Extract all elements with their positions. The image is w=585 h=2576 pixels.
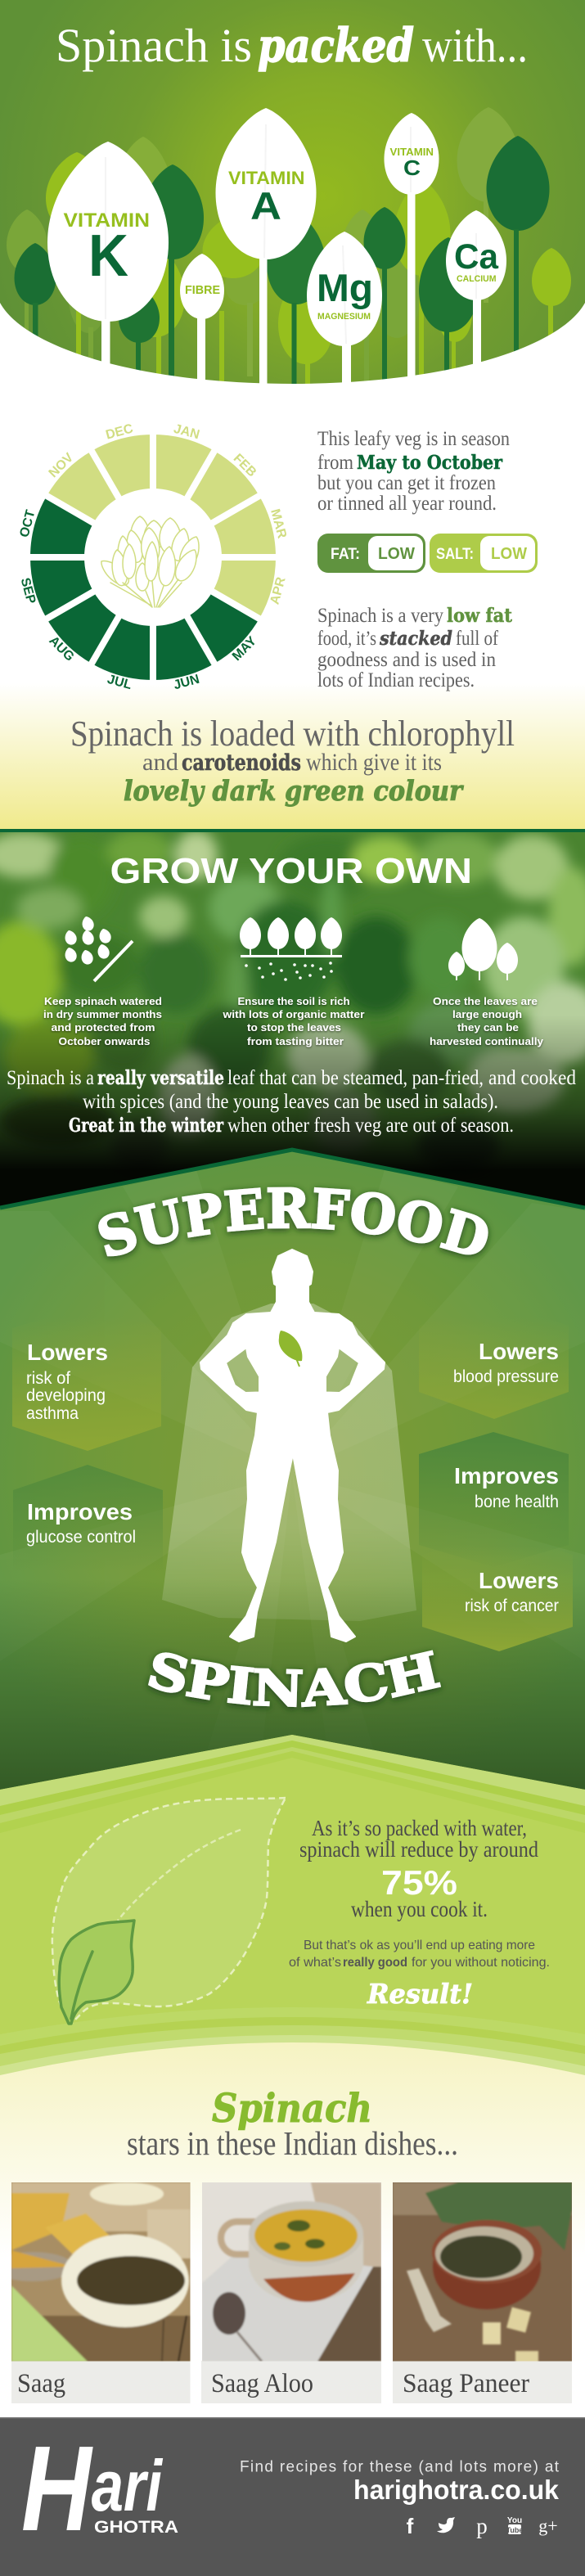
title: Spinach is [56,19,252,72]
caption: soil: from tasting bitter [247,1036,344,1047]
illustration: shrinking leaf [52,1798,286,2024]
label: saag aloo: Saag Aloo [211,2369,313,2398]
caption: watering: Keep spinach watered [44,996,162,1007]
label: saag: Saag [17,2369,65,2398]
text block: reduce by 75 percent: for you without noticing. [412,1956,550,1970]
month labels: AUG [46,633,77,664]
text block: chlorophyll: Spinach is loaded with chlorophyll [70,714,515,754]
leaf: vitamin A: A [250,184,281,227]
silhouette: superhero [200,1250,385,1642]
badge: fat low: FAT: [331,546,360,563]
icons: social media: Tube [506,2526,523,2534]
panel: indian dishes [0,2042,585,2403]
caption: soil: Ensure the soil is rich [237,996,350,1007]
leaf: magnesium: Mg [317,266,373,309]
badge: salt low: SALT: [436,546,474,563]
text block: season [317,428,510,515]
text block: low fat: full of [456,628,499,650]
benefit: improves glucose [26,1499,136,1547]
caption: watering: October onwards [59,1036,151,1047]
icon: rich soil [240,917,342,981]
benefit: improves bone health: bone health [475,1493,559,1511]
text block: versatile leaf: really versatile [97,1067,224,1089]
text block: versatile leaf: and cooked [488,1067,576,1089]
hexagon: blood pressure [419,1301,569,1419]
card: saag [0,2182,191,2403]
benefit: lowers cancer: risk of cancer [465,1596,559,1615]
hexagon: glucose [13,1465,163,1624]
caption: watering: and protected from [51,1022,155,1034]
benefit: lowers asthma: asthma [26,1404,79,1423]
text block: reduce by 75 percent: Result! [367,1978,473,2010]
benefit: lowers blood pressure: blood pressure [453,1367,559,1386]
heading: spinach: SPINACH [146,1649,443,1712]
caption: harvest: Once the leaves are [433,996,538,1007]
text block: chlorophyll: lovely dark green colour [124,775,464,808]
month labels: OCT [17,508,38,539]
caption: harvest [430,996,543,1047]
text block: reduce by 75 percent [289,1816,550,2010]
leaf: calcium: Ca [454,237,499,277]
text: find recipes: Find recipes for these (and lots more) at [240,2458,560,2476]
blurred spinach photo [0,831,585,1225]
text block: versatile leaf: Great in the winter [69,1115,224,1137]
benefit: lowers cancer [465,1568,559,1615]
text block: low fat: Spinach is a very [317,605,443,627]
title [56,19,528,73]
caption: watering: in dry summer months [43,1009,162,1020]
month labels [17,421,289,692]
curved base of header [0,303,585,397]
text block: season: This leafy veg is in season [317,428,510,450]
leaf: calcium: CALCIUM [457,274,496,284]
month labels: APR [268,575,289,606]
text block: season: or tinned all year round. [317,493,497,515]
benefit: lowers cancer: Lowers [479,1568,559,1593]
hexagon: cancer [422,1530,573,1651]
hexagon: bone health [419,1432,569,1567]
text block: reduce by 75 percent: As it’s so packed with water, [312,1816,527,1840]
month labels: MAY [230,634,259,664]
text block: reduce by 75 percent: really good [343,1956,407,1970]
card: saag paneer [393,2182,572,2403]
benefit: improves bone health: Improves [454,1463,559,1488]
month labels: JUN [172,673,201,692]
leaf: vitamin A: VITAMIN [228,168,304,188]
card: saag aloo [201,2182,381,2403]
leaf: vitamin K: K [88,223,128,289]
hexagon: asthma [12,1305,161,1451]
text block: reduce by 75 percent: spinach will reduce by around [299,1837,538,1862]
text block: chlorophyll [70,714,515,808]
month labels: MAR [268,507,289,540]
text block: low fat: stacked [379,628,452,650]
text block: versatile leaf [7,1067,576,1137]
title: packed [258,19,414,73]
text: website: harighotra.co.uk [353,2475,560,2505]
icon: chest leaf [279,1331,302,1367]
text block: low fat: goodness and is used in [317,649,496,671]
month labels: JAN [172,422,201,442]
caption: soil: to stop the leaves [247,1022,341,1034]
benefit: lowers asthma: risk of [26,1369,70,1388]
benefit: improves bone health [454,1463,559,1511]
heading: superfood: SUPERFOOD [95,1185,492,1262]
text block: reduce by 75 percent: when you cook it. [351,1897,488,1921]
icon: spinach bunch [97,516,204,607]
leaf: vitamin C: VITAMIN [389,146,434,158]
benefit: lowers asthma [26,1340,108,1423]
text block: versatile leaf: when other fresh veg are out of season. [227,1115,514,1137]
caption: harvest: they can be [457,1022,519,1034]
leaf: vitamin A [228,168,304,227]
panel: season and chlorophyll background [0,683,585,829]
leaf: vitamin K [64,209,150,289]
photo: saag [0,2182,191,2362]
benefit: lowers asthma: developing [26,1386,106,1405]
title: with... [422,19,528,72]
text block: low fat [317,605,512,691]
text block: versatile leaf: leaf that can be steamed, pan-fried, [227,1067,484,1089]
month labels: JUL [106,673,133,692]
logo: hari ghotra: GHOTRA [94,2518,178,2537]
month labels: FEB [231,452,259,480]
text block: season: from [317,452,353,474]
logo: hari ghotra [21,2421,178,2556]
text block: low fat: low fat [447,605,512,627]
text block: reduce by 75 percent: of what’s [289,1956,341,1970]
month labels: DEC [104,421,135,443]
caption: harvest: large enough [452,1009,522,1020]
label: saag paneer: Saag Paneer [403,2369,529,2398]
photo: saag paneer [393,2182,572,2364]
text block: reduce by 75 percent: But that’s ok as you’ll end up eating more [304,1939,535,1952]
text block: chlorophyll: carotenoids [182,750,301,776]
logo: hari ghotra: H [21,2421,109,2556]
icons: social media: f [407,2514,414,2538]
icon: water drops [63,915,133,981]
leaf: vitamin C [389,146,434,180]
icon: grown leaves [448,918,518,980]
leaf: vitamin K: VITAMIN [64,209,150,232]
badge: salt low: LOW [491,545,527,563]
panel: water content [0,1735,585,2095]
text block: season: but you can get it frozen [317,472,496,494]
badge: fat low: LOW [378,545,415,563]
cape [162,1304,416,1621]
leaf: vitamin C: C [403,155,421,180]
heading: spinach stars: stars in these Indian dishes... [127,2124,458,2162]
text block: versatile leaf: with spices (and the young leaves can be used in salads). [83,1091,498,1113]
benefit: lowers blood pressure: Lowers [479,1339,559,1364]
logo: hari ghotra: ari [92,2445,163,2526]
text block: versatile leaf: Spinach is a [7,1067,94,1089]
panel: superfood [0,1147,585,1790]
leaf: fibre: FIBRE [185,283,220,297]
text block: chlorophyll: which give it its [306,749,442,776]
text block: reduce by 75 percent: 75% [381,1863,457,1902]
month labels: NOV [47,450,77,480]
benefit: improves glucose: glucose control [26,1528,136,1547]
leaf: magnesium: MAGNESIUM [317,312,371,322]
heading: spinach stars [127,2086,458,2162]
icons: social media: g+ [538,2515,558,2536]
benefit: lowers asthma: Lowers [27,1340,108,1365]
heading: grow your own: GROW YOUR OWN [110,851,472,891]
badge: salt low [430,534,538,573]
caption: soil: with lots of organic matter [222,1009,365,1020]
text block: season: May to October [357,452,503,474]
forest of leaves [7,107,571,389]
caption: harvest: harvested continually [430,1036,543,1047]
text block: chlorophyll: and [142,749,178,776]
icons: social media: p [476,2514,488,2538]
icons: social media [407,2514,558,2538]
chart: seasonal wheel [17,421,289,692]
badge: fat low [317,534,425,573]
photo: saag aloo [202,2182,381,2362]
caption: watering [43,996,162,1047]
caption: soil [222,996,365,1047]
benefit: improves glucose: Improves [27,1499,133,1524]
month labels: SEP [18,576,38,606]
panel: footer [0,2417,585,2576]
panel: nutrients header [0,0,585,397]
panel: grow your own [0,829,585,1225]
benefit: lowers blood pressure [453,1339,559,1386]
text block: low fat: food, it’s [317,628,376,650]
text block: low fat: lots of Indian recipes. [317,669,475,691]
heading: spinach stars: Spinach [212,2086,372,2132]
icons: social media: You [507,2516,522,2525]
